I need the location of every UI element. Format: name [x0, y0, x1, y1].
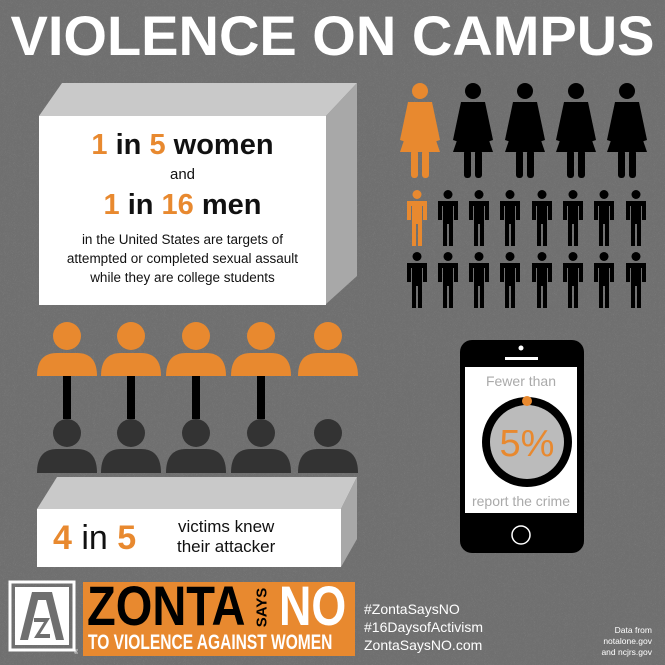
- logo: Zonta says NO banner: SAYS: [254, 588, 270, 627]
- text: stats: [67, 129, 298, 285]
- text: data source: notalone.gov: [603, 636, 652, 646]
- text: 4 in 5: 4 in 5: [53, 519, 136, 557]
- title: VIOLENCE ON CAMPUS: [10, 4, 655, 67]
- text: data source: Data from: [615, 625, 652, 635]
- text: stats: while they are college students: [90, 270, 275, 285]
- text: victims knew: victims knew: [178, 517, 274, 536]
- icon: phone: report the crime: [472, 493, 570, 509]
- text: victims knew: their attacker: [177, 537, 275, 556]
- chart: women and men icons: [400, 83, 647, 308]
- logo: Zonta says NO banner: TO VIOLENCE AGAINST WOMEN: [88, 631, 332, 654]
- text: stats: 1 in 5 women: [91, 129, 274, 161]
- text: data source: and ncjrs.gov: [601, 647, 652, 657]
- chart: victims and attackers: [37, 322, 358, 473]
- text: hashtags: ZontaSaysNO.com: [364, 637, 482, 653]
- text: stats: in the United States are targets of: [82, 232, 283, 247]
- icon: zonta logo: [8, 580, 78, 656]
- text: stats: 1 in 16 men: [104, 189, 261, 221]
- icon: phone: Fewer than: [486, 373, 556, 389]
- text: data source: [601, 625, 652, 657]
- text: hashtags: [364, 601, 483, 653]
- text: hashtags: #ZontaSaysNO: [364, 601, 460, 617]
- icon: phone: 5%: [500, 423, 554, 465]
- logo: Zonta says NO banner: [83, 582, 355, 656]
- text: stats: and: [170, 166, 195, 183]
- text: stats: attempted or completed sexual assault: [67, 251, 298, 266]
- text: victims knew: [177, 517, 275, 556]
- panel: statistic box: [39, 83, 357, 305]
- text: hashtags: #16DaysofActivism: [364, 619, 483, 635]
- icon: phone: [460, 340, 584, 553]
- panel: 4 in 5 box: [37, 477, 357, 567]
